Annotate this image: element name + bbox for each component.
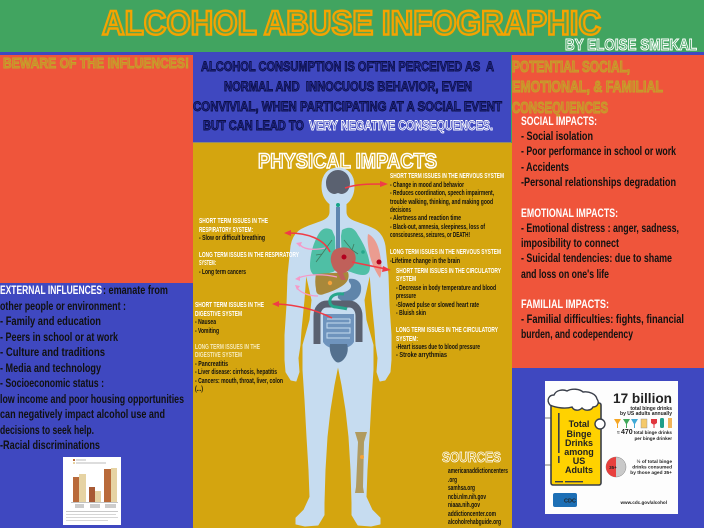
heading: consequences: [512, 59, 663, 117]
sources: niaaa.nih.gov: [448, 502, 480, 509]
text: nervous system: - Change in mood and behavior: [390, 182, 464, 189]
icon: CDC logo: CDC: [564, 498, 576, 504]
text: nervous system: SHORT TERM ISSUES IN THE NERVOUS SYSTEM: [390, 173, 504, 180]
statistic: 470 per binge drinker: total binge drinks: [634, 430, 672, 435]
text: intro statement: VERY NEGATIVE CONSEQUENCES.: [309, 118, 493, 133]
text: respiratory issues: - Slow or difficult breathing: [199, 235, 265, 242]
text: circulatory system: - Bluish skin: [396, 310, 426, 317]
text: external influences list: - Peers in school or at work: [0, 330, 118, 344]
text: external influences list: other people or environment :: [0, 299, 126, 313]
text: social impacts: - Social isolation: [521, 129, 593, 143]
text: nervous system: - Black-out, amnesia, sleepiness, loss of: [390, 224, 485, 231]
text: circulatory system: [396, 268, 501, 359]
panel: potential consequences: [511, 55, 704, 368]
text: familial impacts: [521, 297, 684, 341]
throat marker: [336, 203, 340, 207]
text: nervous system: - Alertness and reaction time: [390, 215, 461, 222]
body figure: [285, 168, 391, 526]
text: digestive long term: LONG TERM ISSUES IN THE: [195, 344, 260, 351]
mug text: Drinks: [565, 438, 593, 448]
leg bone: [355, 432, 367, 493]
text: circulatory system: SHORT TERM ISSUES IN THE CIRCULATORY: [396, 268, 501, 275]
statistic: 470 per binge drinker: ≈: [617, 430, 620, 436]
text: nervous system: decisions: [390, 207, 411, 214]
mug text: Adults: [565, 465, 593, 475]
mug text: [564, 419, 594, 475]
text: circulatory system: SYSTEM: [396, 276, 416, 283]
arrow: to circulatory: [352, 262, 391, 272]
liver: [315, 272, 349, 295]
statistic: half consumed by aged 35+: drinks consumed: [632, 464, 672, 470]
text: digestive long term: DIGESTIVE SYSTEM: [195, 352, 242, 359]
text: digestive short term: - Nausea: [195, 319, 216, 326]
statistic: 470 per binge drinker: [617, 429, 672, 441]
panel: binge drinks blue background: [512, 368, 704, 528]
mug text: among: [564, 447, 594, 457]
pie chart: 35+: 35+: [609, 465, 617, 470]
bar chart: [63, 457, 121, 525]
stomach: [338, 279, 361, 301]
text: external influences list: - Media and technology: [0, 361, 101, 375]
text: external influences list: - Family and education: [0, 314, 101, 328]
text: nervous system: - Reduces coordination, speech impairment,: [390, 190, 494, 197]
small duct: [330, 294, 347, 309]
text: emotional impacts: and loss on one's life: [521, 267, 609, 281]
text: digestive short term: DIGESTIVE SYSTEM: [195, 311, 242, 318]
panel: intro statement: [193, 52, 511, 142]
text: social impacts: [521, 114, 676, 189]
text: circulatory system: - Stroke arrythmias: [396, 352, 447, 359]
text: circulatory system: LONG TERM ISSUES IN THE CIRCULATORY: [396, 327, 498, 334]
text: respiratory issues: - Long term cancers: [199, 269, 246, 276]
text: external influences list: EXTERNAL INFLUENCES: [0, 283, 102, 297]
heading: consequences: EMOTIONAL, & FAMILIAL: [512, 79, 663, 96]
statistic: 470 per binge drinker: 470: [621, 429, 633, 436]
text: external influences list: decisions to seek help.: [0, 423, 94, 437]
arrows: [272, 181, 391, 318]
text: external influences list: -Racial discriminations: [0, 438, 100, 452]
sources: alcoholrehabguide.org: [448, 519, 501, 526]
text: external influences list: - Socioeconomic status :: [0, 376, 104, 390]
text: nervous system: -Lifetime change in the brain: [390, 258, 460, 265]
colon: [317, 304, 359, 344]
arrow: to digestive long term lower: [295, 285, 318, 296]
mug text: Total: [569, 419, 589, 429]
statistic: half consumed by aged 35+: ½ of total binge: [637, 458, 672, 465]
heading: beware: BEWARE OF THE INFLUENCES!: [3, 56, 189, 72]
text: circulatory system: -Slowed pulse or slowed heart rate: [396, 302, 479, 309]
text: social impacts: - Accidents: [521, 160, 569, 174]
text: digestive long term: (...): [195, 386, 203, 393]
trachea and spine: [336, 207, 340, 259]
text: intro statement: NORMAL AND INNOCUOUS BEHAVIOR, EVEN: [224, 79, 472, 94]
icon: row of drinks: [614, 418, 672, 428]
text: circulatory system: pressure: [396, 293, 416, 300]
heading: sources: SOURCES: [442, 449, 501, 466]
text: external influences list: [0, 283, 184, 452]
mug text: US: [573, 456, 585, 466]
panel: physical impacts: [193, 142, 512, 528]
lung branches: [316, 240, 358, 262]
arrow: to digestive long term: [295, 275, 337, 281]
statistic: 470 per binge drinker: per binge drinker: [634, 436, 672, 441]
small intestine: [323, 314, 354, 349]
website: www.cdc.gov/alcohol: [619, 500, 667, 505]
text: familial impacts: burden, and codependency: [521, 327, 633, 341]
header banner: [0, 0, 704, 52]
brain: [326, 170, 350, 194]
mug text: Binge: [566, 429, 592, 439]
text: intro statement: [193, 59, 503, 133]
text: nervous system: trouble walking, thinking, and making good: [390, 199, 493, 206]
text: digestive long term: - Cancers: mouth, throat, liver, colon: [195, 378, 283, 385]
text: intro statement: ALCOHOL CONSUMPTION IS OFTEN PERCEIVED AS A: [201, 59, 494, 74]
text: circulatory system: SYSTEM:: [396, 336, 418, 343]
statistic: half consumed by aged 35+: by those aged 35+: [630, 470, 672, 476]
title: ALCOHOL ABUSE INFOGRAPHIC: [102, 4, 601, 42]
text: emotional impacts: EMOTIONAL IMPACTS:: [521, 206, 618, 220]
text: external influences list: : emanate from: [103, 283, 168, 297]
text: nervous system: LONG TERM ISSUES IN THE NERVOUS SYSTEM: [390, 249, 501, 256]
panel: external influences: [0, 283, 193, 528]
silhouette: [285, 168, 391, 526]
sources: samhsa.org: [448, 485, 475, 492]
heading: physical impacts: PHYSICAL IMPACTS: [258, 150, 437, 173]
icon: beer mug: [545, 389, 605, 485]
arrow: to respiratory short term: [284, 230, 330, 252]
heading: consequences: CONSEQUENCES: [512, 100, 608, 117]
arrow: to nervous system: [345, 181, 388, 188]
text: digestive short term: - Vomiting: [195, 328, 219, 335]
statistic: 17 billion: total binge drinks: [630, 406, 672, 412]
panel: beware of the influences: [0, 55, 193, 283]
statistic: 17 billion: 17 billion: [613, 391, 672, 406]
statistic: half consumed by aged 35+: [630, 458, 672, 476]
text: respiratory issues: SYSTEM:: [199, 260, 216, 267]
CDC binge drinking card: [545, 381, 678, 514]
text: respiratory issues: RESPIRATORY SYSTEM:: [199, 227, 253, 234]
text: emotional impacts: imposibility to connect: [521, 236, 619, 250]
statistic: 17 billion: by US adults annually: [620, 411, 672, 417]
sources: [442, 449, 508, 526]
text: intro statement: BUT CAN LEAD TO: [203, 118, 304, 133]
text: nervous system: consciousness, seizures, or DEATH!: [390, 232, 470, 239]
sources: americanaddictioncenters: [448, 468, 508, 475]
sources: addictioncenter.com: [448, 511, 496, 518]
heart: [331, 247, 356, 280]
sources: ncbi.nlm.nih.gov: [448, 494, 486, 501]
text: nervous system: [390, 173, 504, 265]
text: intro statement: CONVIVIAL, WHEN PARTICIPATING AT A SOCIAL EVENT: [193, 99, 503, 114]
text: external influences list: can negatively impact alcohol use and: [0, 407, 165, 421]
heading: consequences: POTENTIAL SOCIAL,: [512, 59, 630, 76]
text: digestive long term: - Liver disease: cirrhosis, hepatitis: [195, 369, 277, 376]
text: external influences list: low income and poor housing opportunities: [0, 392, 184, 406]
text: social impacts: SOCIAL IMPACTS:: [521, 114, 597, 128]
text: digestive short term: [195, 302, 264, 335]
text: external influences list: - Culture and traditions: [0, 345, 105, 359]
text: circulatory system: - Decrease in body temperature and blood: [396, 285, 496, 292]
arrow: to digestive short term: [272, 301, 332, 318]
text: emotional impacts: [521, 206, 679, 281]
bladder: [330, 344, 348, 362]
text: respiratory issues: SHORT TERM ISSUES IN THE: [199, 218, 268, 225]
text: digestive long term: [195, 344, 283, 393]
lungs: [310, 228, 336, 276]
text: digestive short term: SHORT TERM ISSUES IN THE: [195, 302, 264, 309]
statistic: 17 billion: [613, 391, 672, 417]
sources: .org: [448, 477, 457, 484]
text: circulatory system: -Heart issues due to blood pressure: [396, 344, 480, 351]
arm muscle: [368, 234, 382, 278]
text: familial impacts: FAMILIAL IMPACTS:: [521, 297, 609, 311]
text: respiratory issues: [199, 218, 299, 276]
arrow: to respiratory long term: [296, 242, 325, 249]
text: respiratory issues: LONG TERM ISSUES IN THE RESPIRATORY: [199, 252, 299, 259]
text: digestive long term: - Pancreatitis: [195, 361, 228, 368]
